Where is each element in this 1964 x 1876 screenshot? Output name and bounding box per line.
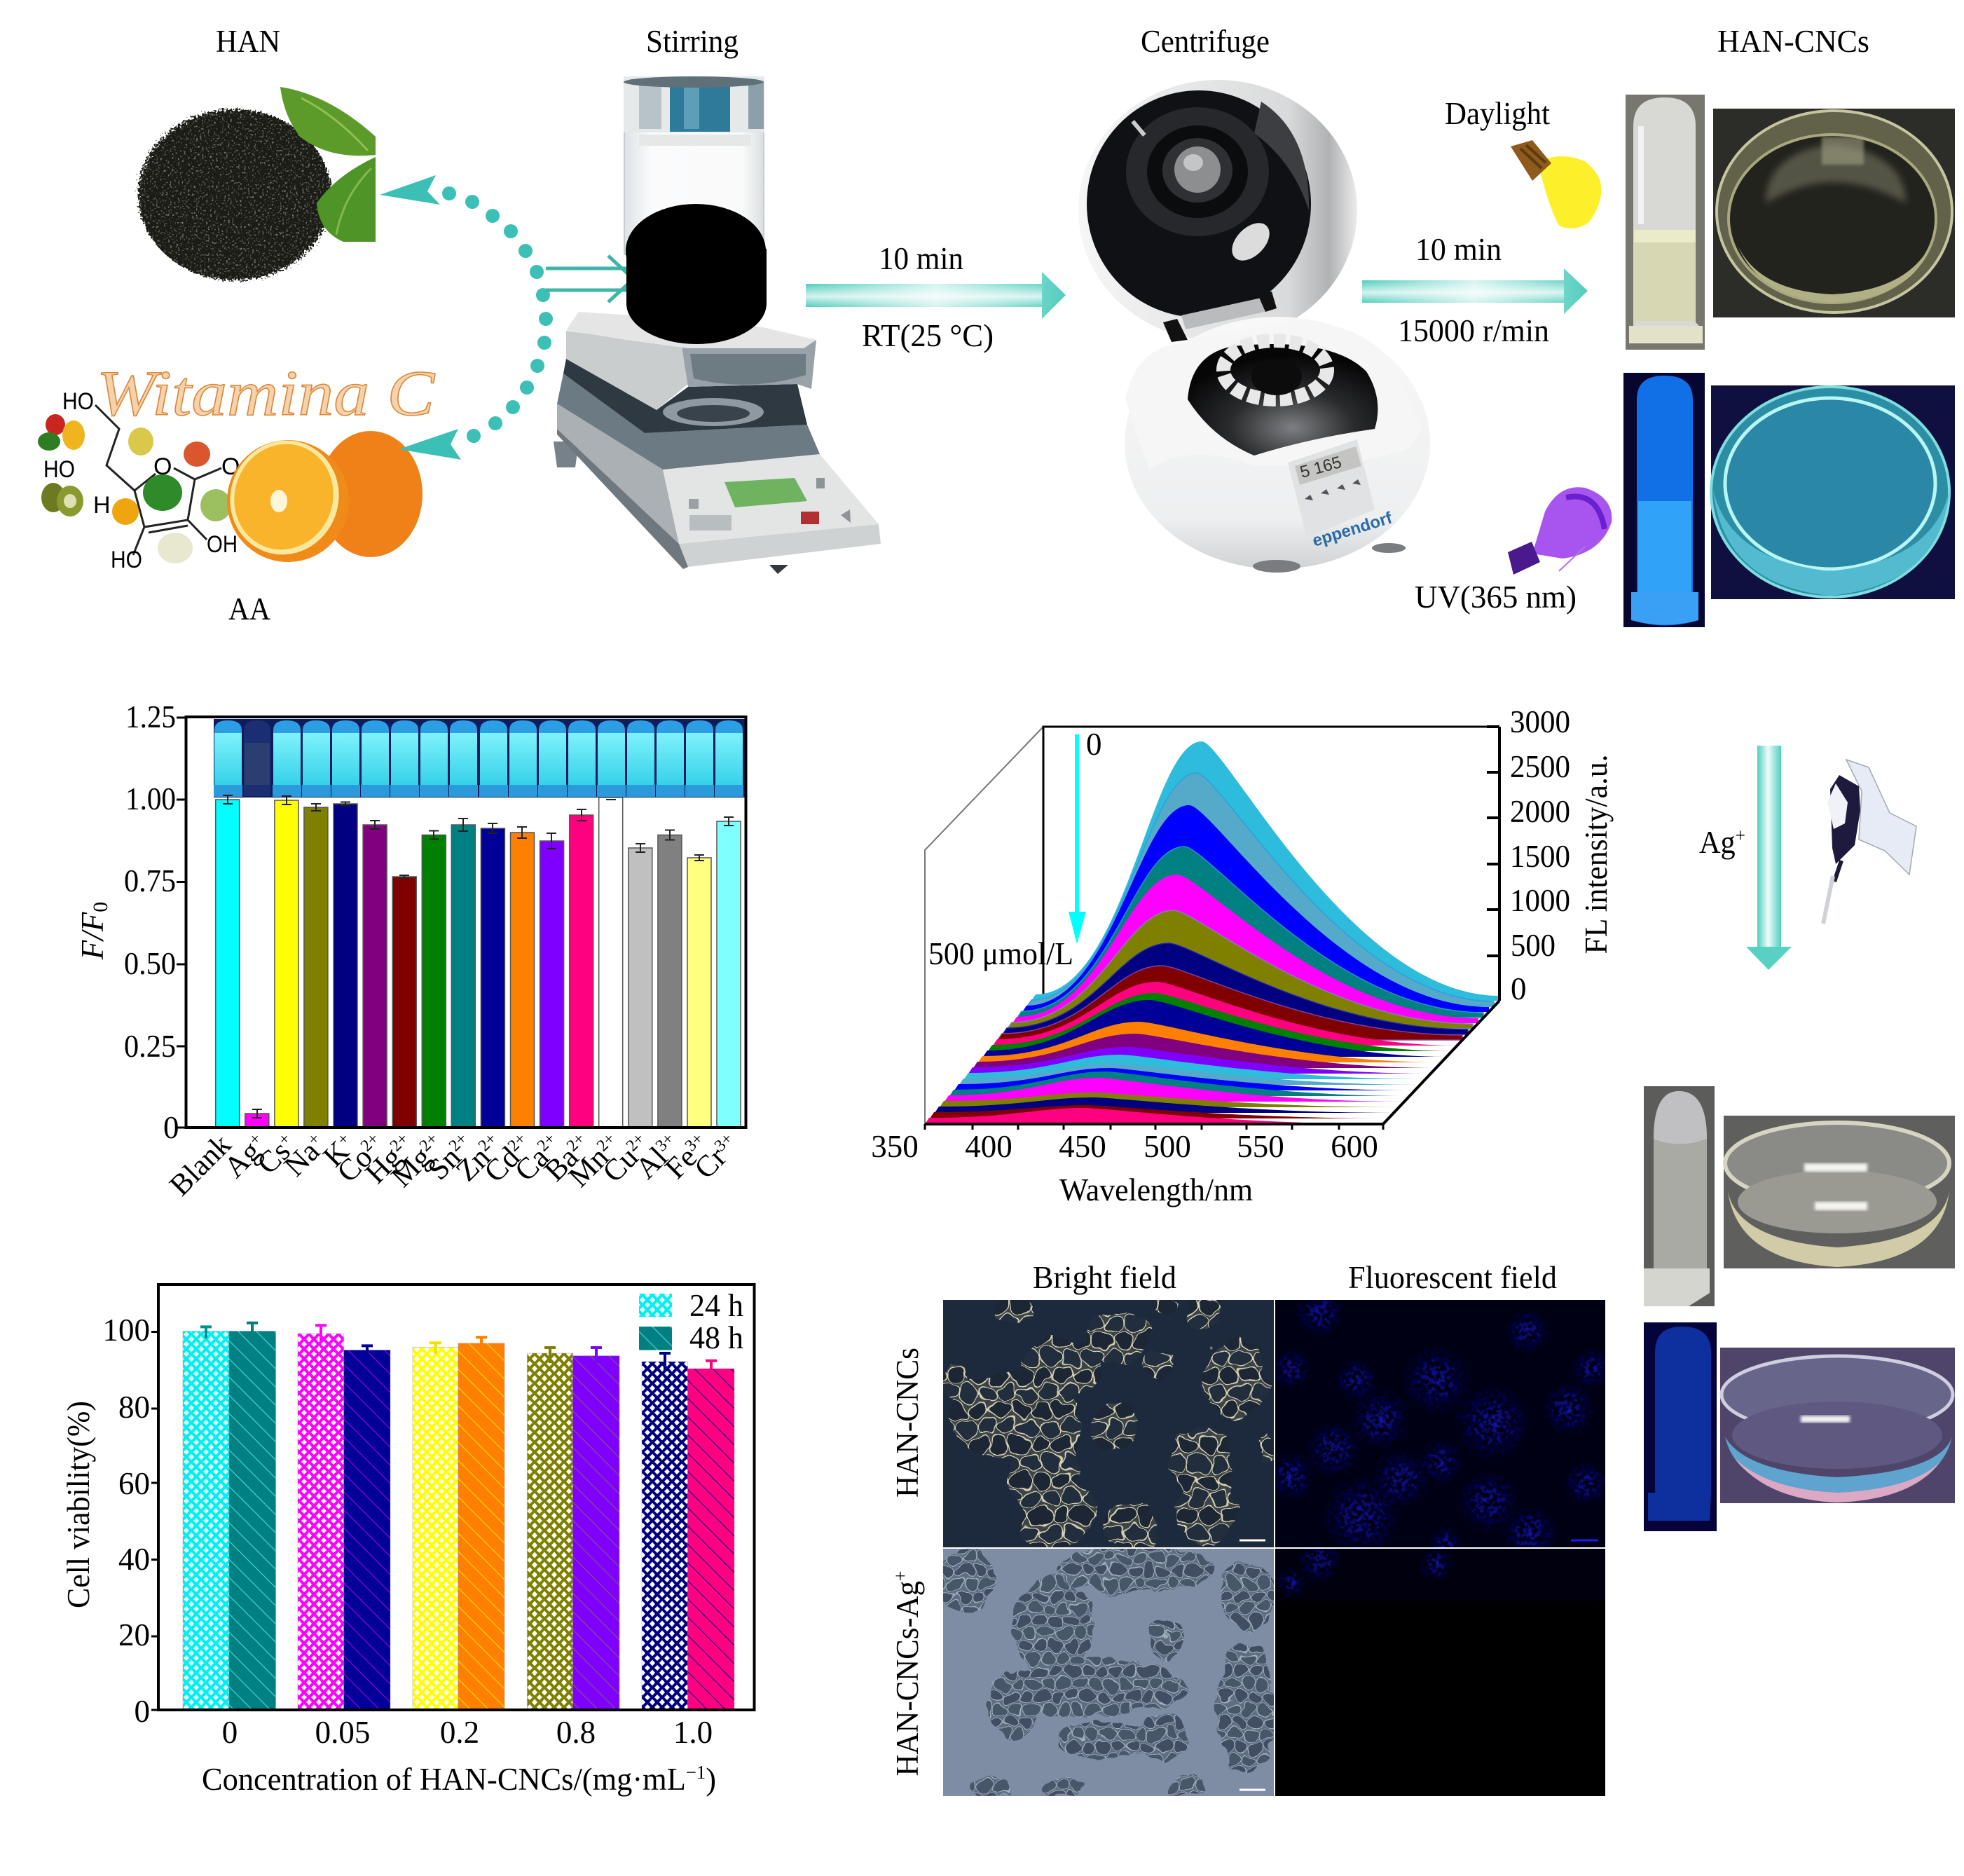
x axis title: −1 [686, 1762, 706, 1783]
molecule atom labels: HO [62, 388, 94, 415]
molecule atom labels: O [221, 453, 240, 480]
label: 10 min (stirring): 10 min [879, 241, 963, 276]
x tick labels: 2+ [475, 1130, 500, 1155]
x tick labels: Mg [385, 1141, 438, 1193]
x tick labels: 2+ [563, 1130, 589, 1155]
balance display screen [725, 478, 807, 507]
label: Ag+: Ag [1699, 825, 1738, 860]
y tick labels: 40 [118, 1542, 150, 1577]
handwritten title Witamina C: Witamina C [97, 357, 436, 429]
column label: Bright field: Bright field [1033, 1260, 1176, 1295]
x axis title: ) [706, 1762, 716, 1797]
x axis labels: 600 [1331, 1129, 1378, 1164]
photo: petri dish with Ag+ in daylight [1724, 1116, 1955, 1268]
x tick labels: Cs [251, 1135, 296, 1181]
y tick labels: 1.25 [125, 699, 176, 734]
x tick labels: 3+ [711, 1130, 736, 1155]
label: Ag+: + [1736, 825, 1745, 846]
tube photo strip [214, 719, 745, 797]
icon: gloved hand with pipette [1823, 760, 1916, 924]
y tick labels: 20 [118, 1617, 150, 1652]
x axis labels: 400 [965, 1129, 1012, 1164]
row label: HAN-CNCs-Ag+: + [890, 1570, 911, 1581]
bars [216, 797, 741, 1128]
right axis [1487, 727, 1499, 1001]
rotor ring [1223, 341, 1327, 399]
x tick labels: 0.2 [440, 1715, 479, 1750]
x tick labels: Blank [163, 1128, 238, 1203]
label: Daylight: Daylight [1445, 96, 1550, 131]
right axis labels: 2000 [1510, 794, 1570, 829]
y ticks [151, 1331, 158, 1710]
centrifuge control panel [1288, 439, 1375, 538]
micrograph panel [890, 1260, 1612, 1797]
y tick labels [124, 699, 179, 1145]
axes frame [186, 717, 746, 1128]
label: UV (365 nm): UV(365 nm) [1415, 580, 1577, 615]
chart: selectivity bar chart F/F0 [75, 699, 746, 1203]
label: 0: 0 [1086, 727, 1101, 762]
y tick labels: 1.00 [125, 781, 176, 816]
y tick labels: 100 [102, 1313, 150, 1348]
y axis title: Cell viability(%) [61, 1401, 96, 1608]
x tick labels: 3+ [682, 1130, 707, 1155]
y tick labels: 0 [163, 1110, 179, 1145]
x tick labels: 2+ [623, 1130, 648, 1155]
photo: tube under UV [1623, 373, 1705, 627]
x tick labels: 1.0 [673, 1715, 713, 1750]
molecule atom labels [43, 388, 240, 573]
photo: petri dish with Ag+ under UV [1720, 1348, 1955, 1503]
y tick labels: 60 [118, 1466, 150, 1501]
x axis labels: 350 [871, 1129, 919, 1164]
x tick labels: 2+ [593, 1130, 619, 1155]
axes frame [158, 1285, 754, 1710]
x tick labels: Ag [218, 1135, 267, 1184]
label: 500 µmol/L: 500 μmol/L [928, 936, 1073, 971]
x axis labels: 550 [1237, 1129, 1284, 1164]
legend: 48 h [689, 1320, 743, 1355]
x tick labels: + [304, 1130, 324, 1149]
x tick labels: Fe [659, 1141, 703, 1186]
double arrow into stirring jar [546, 256, 633, 302]
molecule bonds [95, 405, 221, 555]
x tick labels: 2+ [534, 1130, 559, 1155]
y tick labels [102, 1313, 150, 1729]
x axis labels: 500 [1144, 1129, 1191, 1164]
heading: Stirring: Stirring [646, 24, 739, 59]
photo: petri dish under daylight [1713, 109, 1955, 317]
x tick labels: Ca [509, 1141, 556, 1188]
row label: HAN-CNCs-Ag+: HAN-CNCs-Ag [890, 1571, 925, 1776]
x tick labels: Hg [359, 1141, 408, 1190]
label: 15000 r/min: 15000 r/min [1398, 313, 1549, 348]
centrifuge control panel: 5 165 [1298, 453, 1344, 482]
micrograph: fluorescent field HAN-CNCs-Ag+ [1275, 1536, 1605, 1796]
right axis labels: 1500 [1510, 839, 1570, 874]
feet [1253, 543, 1406, 573]
balance buttons [689, 478, 851, 530]
heading: Centrifuge: Centrifuge [1141, 24, 1270, 59]
oranges [210, 423, 423, 580]
heading: HAN-CNCs: HAN-CNCs [1717, 24, 1869, 59]
x tick labels: + [275, 1130, 294, 1149]
y axis title F/F0: 0 [89, 902, 112, 912]
concentration arrow [1069, 734, 1086, 944]
x tick labels: + [245, 1130, 265, 1149]
y tick labels: 0.75 [124, 863, 176, 898]
right axis labels: 2500 [1510, 749, 1570, 784]
column label: Fluorescent field: Fluorescent field [1348, 1260, 1557, 1295]
label: AA: AA [228, 591, 270, 627]
dotted arc linking stirring to raw materials [380, 175, 553, 460]
icon: HAN powder with leaves [138, 87, 376, 280]
chart: cell viability bars [61, 1285, 754, 1797]
x axis labels: 450 [1059, 1129, 1106, 1164]
x tick labels: + [334, 1130, 353, 1149]
x tick labels: K [317, 1135, 355, 1174]
heading: HAN: HAN [216, 24, 280, 59]
centrifuge hinge [1163, 292, 1277, 342]
arrow: adding Ag+ downward [1746, 746, 1792, 970]
error bars [200, 1323, 717, 1376]
chart: 3D fluorescence spectra [871, 704, 1614, 1207]
molecule atom labels: HO [43, 456, 75, 483]
icon: yellow bulb [1511, 140, 1602, 228]
molecule atom labels: HO [111, 547, 142, 573]
right axis labels: 3000 [1510, 704, 1570, 739]
fruits and vegetables [38, 414, 231, 563]
x tick labels: 0.8 [556, 1715, 596, 1750]
molecule atom labels: H [93, 492, 111, 519]
photo: petri dish under UV [1711, 385, 1955, 599]
icon: UV bulb [1508, 487, 1612, 575]
x tick labels: Cr [688, 1141, 733, 1186]
x tick labels: Na [278, 1135, 326, 1183]
arrowhead to HAN [380, 175, 440, 205]
row label: HAN-CNCs: HAN-CNCs [890, 1348, 925, 1498]
legend [639, 1288, 743, 1355]
photo: tube with Ag+ in daylight [1644, 1086, 1715, 1306]
label: 10 min (centrifuge): 10 min [1415, 232, 1502, 267]
x tick labels [163, 1128, 746, 1203]
y tick labels: 80 [118, 1390, 150, 1425]
y tick labels: 0.50 [124, 946, 176, 981]
icon: magnetic stirrer with jar [554, 76, 881, 574]
eppendorf logo: eppendorf [1310, 508, 1395, 551]
label: RT (25 °C): RT(25 °C) [862, 318, 994, 353]
x tick labels: Ba [538, 1141, 585, 1188]
x tick labels: Al [629, 1141, 674, 1186]
molecule atom labels: O [153, 453, 172, 480]
micrograph: bright field HAN-CNCs-Ag+ [939, 1545, 1277, 1797]
y tick labels: 0.25 [124, 1029, 176, 1064]
right axis labels: 0 [1511, 971, 1526, 1006]
x tick labels: Zn [450, 1141, 497, 1188]
arrow: centrifuge to product [1362, 268, 1588, 314]
x tick labels: Cu [596, 1141, 645, 1189]
x tick labels: Cd [478, 1141, 526, 1189]
x tick labels: 2+ [416, 1130, 441, 1155]
photo: tube under daylight [1626, 95, 1705, 350]
x tick labels: 0 [222, 1715, 238, 1750]
molecule atom labels: OH [207, 531, 238, 558]
x axis ticks [925, 1124, 1383, 1130]
y tick labels: 0 [135, 1694, 150, 1729]
3D box frame [925, 727, 1043, 1124]
x axis labels [871, 1129, 1378, 1164]
y axis title: FL intensity/a.u. [1579, 754, 1614, 954]
error bars [223, 795, 734, 1118]
x tick labels: Sn [422, 1141, 467, 1186]
micrograph: bright field HAN-CNCs [942, 1292, 1277, 1551]
y axis title F/F0: F/F [75, 912, 110, 959]
icon: centrifuge [1078, 80, 1430, 573]
base axes and diagonal [925, 1001, 1499, 1124]
micrograph: fluorescent field HAN-CNCs [1275, 1300, 1605, 1547]
right axis labels [1510, 704, 1570, 1006]
x tick labels [222, 1715, 713, 1750]
spectra stack [925, 741, 1499, 1124]
right axis labels: 500 [1511, 928, 1556, 963]
y ticks [177, 718, 186, 1128]
legend: 24 h [689, 1288, 743, 1323]
arrow: stirring to centrifuge [806, 272, 1066, 319]
black sample in jar [626, 204, 767, 344]
x tick labels: Co [331, 1141, 379, 1189]
x tick labels: 2+ [504, 1130, 530, 1155]
x tick labels: Mn [563, 1141, 615, 1193]
x tick labels: 2+ [446, 1130, 471, 1155]
right axis labels: 1000 [1510, 883, 1570, 918]
x tick labels: 0.05 [315, 1715, 370, 1750]
photo: tube with Ag+ under UV [1644, 1322, 1717, 1531]
x tick labels: 2+ [357, 1130, 383, 1155]
x tick labels: 2+ [387, 1130, 412, 1155]
icon: vitamin C collage [38, 357, 436, 580]
x axis title: Wavelength/nm [1059, 1172, 1253, 1207]
arrowhead to AA [399, 429, 461, 460]
x axis title: Concentration of HAN-CNCs/(mg·mL [202, 1762, 692, 1797]
x tick labels: 3+ [652, 1130, 678, 1155]
bars 24 h and 48 h [183, 1331, 734, 1710]
